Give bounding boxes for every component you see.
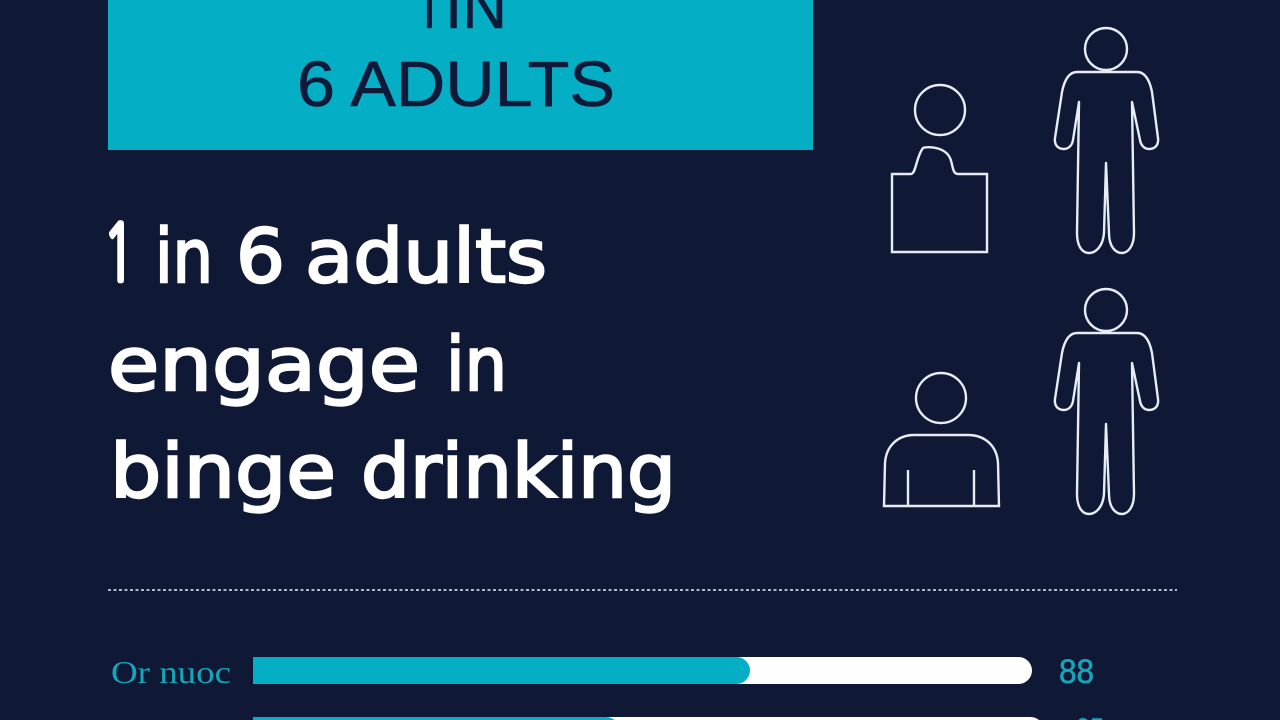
headline: engage bbox=[108, 322, 420, 408]
headline: adults bbox=[305, 214, 547, 300]
bar track and fill bbox=[253, 657, 1032, 684]
banner: 1 in 6 adults bbox=[108, 0, 813, 150]
icon: standing person, bottom bbox=[1055, 289, 1158, 514]
headline: in bbox=[155, 214, 213, 300]
headline: drinking bbox=[361, 429, 676, 515]
bar track and fill bbox=[253, 717, 1044, 720]
headline: 1 bbox=[103, 215, 135, 293]
banner: 1 in 6 adults: 6 ADULTS bbox=[297, 48, 615, 120]
icon: seated person with box body bbox=[892, 85, 987, 252]
headline: 6 bbox=[236, 214, 285, 300]
bar value: 88 bbox=[1059, 653, 1094, 691]
bar row 1 bbox=[111, 653, 1094, 691]
headline: in bbox=[446, 322, 507, 408]
icon: bust person bbox=[884, 373, 999, 506]
bar label: Or nuoc bbox=[111, 654, 231, 690]
headline bbox=[103, 214, 676, 515]
bar row 2 bbox=[253, 712, 1104, 720]
headline: binge bbox=[110, 429, 336, 515]
icon: standing person, top bbox=[1055, 28, 1158, 253]
